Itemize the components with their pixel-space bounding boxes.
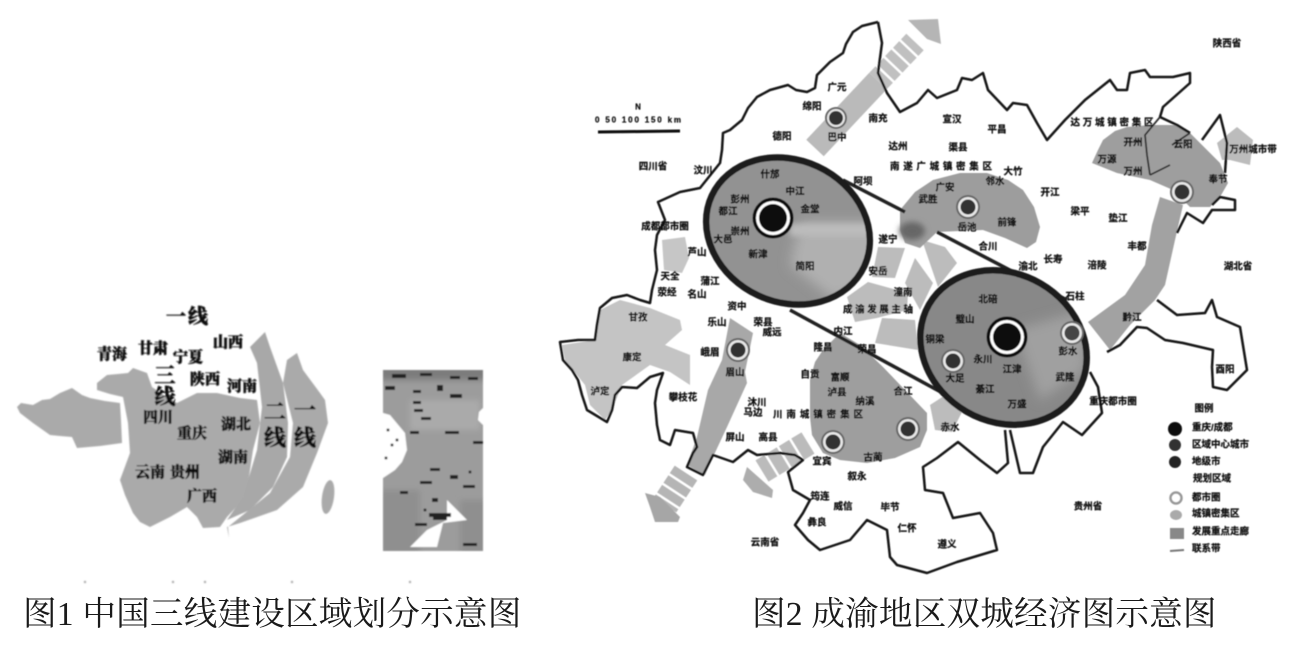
place labels: 长寿 [1043, 254, 1063, 266]
labels: provinces and fronts: 青海 [97, 345, 127, 363]
connector lines between circles [790, 180, 1067, 397]
place labels: 德阳 [772, 130, 792, 142]
region: Taiwan [320, 479, 336, 515]
labels: provinces and fronts: 湖南 [218, 448, 248, 466]
place labels: 峨眉 [700, 346, 720, 358]
place labels: 璧山 [955, 314, 975, 326]
place labels: 前锋 [997, 216, 1017, 228]
place labels: 广安 [935, 182, 955, 194]
circle: Chongqing metropolitan area [916, 266, 1091, 429]
place labels: 武隆 [1055, 372, 1075, 384]
place labels: 永川 [973, 354, 993, 366]
labels: provinces and fronts: 二 [264, 400, 286, 424]
place labels: 酉阳 [1215, 364, 1235, 376]
inner boundaries: northeast [1145, 117, 1190, 175]
place labels: 遂宁 [878, 234, 898, 246]
place labels: 遵义 [937, 538, 957, 550]
place labels: 江津 [1002, 364, 1022, 376]
legend: 规划区域 [1193, 472, 1232, 484]
map scale bar [595, 102, 681, 132]
place labels: 成都都市圈 [641, 220, 689, 232]
place labels: 陕西省 [1213, 38, 1242, 50]
place labels: 渠县 [948, 142, 968, 154]
labels: provinces and fronts: 一线 [166, 305, 208, 328]
labels: provinces and fronts: 一 [294, 398, 316, 422]
place labels: 康定 [622, 352, 642, 364]
place labels: 开江 [1040, 186, 1060, 198]
legend item: metropolitan circle [1170, 492, 1221, 504]
place labels: 彭水 [1058, 346, 1078, 358]
labels: provinces and fronts: 广西 [187, 487, 217, 505]
region: first-front strip [227, 353, 328, 538]
labels: provinces and fronts [97, 305, 316, 505]
place labels: 宜宾 [812, 456, 832, 468]
place labels: 隆昌 [813, 342, 833, 354]
place labels: 简阳 [795, 260, 815, 272]
place labels: 梁平 [1070, 206, 1090, 218]
legend item: prefecture city [1169, 456, 1221, 468]
place labels: 乐山 [707, 316, 727, 328]
place labels: 彝良 [807, 516, 827, 528]
place labels: 渝北 [1018, 260, 1038, 272]
place labels: 马边 [743, 406, 763, 418]
place labels: 宣汉 [942, 114, 962, 126]
place labels: 都江 [718, 206, 738, 218]
place labels: 荥经 [657, 286, 677, 298]
place labels: 自贡 [800, 368, 820, 380]
place labels: 甘孜 [628, 312, 648, 324]
labels: provinces and fronts: 线 [154, 385, 176, 409]
legend item: core city [1168, 422, 1233, 436]
place labels: 新津 [748, 248, 768, 260]
marker: Chengdu [752, 198, 794, 238]
labels: provinces and fronts: 河南 [227, 377, 257, 395]
corridor: east band [1088, 197, 1183, 350]
place labels: 奉节 [1208, 174, 1228, 186]
patch: northeast tail [1217, 127, 1253, 165]
corridor: southwest arrow [645, 318, 753, 522]
place labels: 合川 [978, 240, 998, 252]
place labels: 金堂 [800, 204, 820, 216]
legend item: dense urban area: 城镇密集区 [1192, 508, 1240, 520]
patch: western light area [562, 300, 690, 420]
legend item: development corridor: 发展重点走廊 [1192, 526, 1250, 538]
markers: regional cities [726, 107, 1194, 454]
city markers [726, 107, 1194, 454]
place labels: 泸定 [590, 386, 610, 398]
place labels: 綦江 [975, 384, 995, 396]
place labels: 威远 [762, 326, 782, 338]
legend item: metropolitan circle: 都市圈 [1192, 492, 1221, 504]
place labels: 贵州省 [1074, 500, 1103, 512]
labels: provinces and fronts: 三 [154, 364, 176, 388]
place labels: 万州 [1123, 166, 1143, 178]
faint scan marks [84, 581, 411, 583]
place labels: 高县 [758, 432, 778, 444]
corridor: central fan bands [847, 240, 962, 432]
place labels: 南遂广城镇密集区 [890, 160, 992, 172]
place labels: 川南城镇密集区 [773, 408, 863, 420]
place labels: 潼南 [893, 286, 913, 298]
place labels: 毕节 [880, 502, 900, 514]
region: northeast city cluster [1092, 125, 1228, 207]
place labels: 沐川 [747, 396, 767, 408]
place labels: 资中 [727, 300, 747, 312]
place labels: 合江 [893, 386, 913, 398]
place labels: 绵阳 [802, 100, 822, 112]
corridor: north arrow [815, 19, 941, 148]
labels: provinces and fronts: 山西 [213, 333, 243, 351]
place labels: 广元 [827, 82, 847, 94]
place labels: 古蔺 [863, 452, 883, 464]
outline: study region boundary [560, 22, 1008, 573]
place labels: 重庆都市圈 [1089, 396, 1137, 408]
place labels: 荣县 [753, 316, 773, 328]
place labels: 平昌 [987, 124, 1007, 136]
place labels: 黔江 [1122, 312, 1142, 324]
patch: dark cluster [899, 222, 925, 240]
place labels: 达州 [888, 140, 908, 152]
legend item: regional centre [1169, 438, 1250, 451]
place labels [590, 38, 1277, 550]
map scale bar: 0 50 100 150 km [595, 116, 681, 124]
figure 2: Chengdu-Chongqing twin-city map [560, 19, 1277, 573]
labels: provinces and fronts: 贵州 [170, 463, 200, 481]
place labels: 威信 [833, 500, 853, 512]
place labels: 屏山 [725, 432, 745, 444]
place labels: 什邡 [760, 168, 780, 180]
place labels: 彭州 [730, 194, 750, 206]
place labels: 万源 [1097, 154, 1117, 166]
place labels: 眉山 [725, 366, 745, 378]
region: south city cluster [810, 333, 927, 463]
legend item: core city: 重庆/成都 [1192, 422, 1233, 434]
labels: provinces and fronts: 宁夏 [173, 348, 203, 366]
inset: South China Sea map [382, 369, 484, 552]
labels: provinces and fronts: 重庆 [177, 424, 207, 442]
place labels: 云南省 [751, 536, 780, 548]
place labels: 仁怀 [897, 522, 917, 534]
region: second-front strip [227, 332, 288, 520]
place labels: 蒲江 [700, 276, 720, 288]
place labels: 武胜 [918, 194, 938, 206]
legend: 图例 [1194, 402, 1214, 414]
place labels: 四川省 [639, 160, 668, 172]
labels: provinces and fronts: 湖北 [221, 415, 251, 433]
marker: Chongqing [986, 316, 1028, 358]
place labels: 攀枝花 [669, 392, 698, 404]
legend item: link belt: 联系带 [1192, 542, 1221, 554]
region: north city cluster [900, 173, 1040, 248]
place labels: 万盛 [1007, 398, 1027, 410]
place labels: 北碚 [978, 294, 998, 306]
map scale bar: N [635, 102, 641, 112]
place labels: 万州城市带 [1229, 144, 1277, 156]
region: third-front main area [97, 368, 260, 528]
place labels: 垫江 [1108, 212, 1128, 224]
labels: provinces and fronts: 四川 [143, 409, 173, 426]
labels: provinces and fronts: 云南 [135, 463, 165, 481]
place labels: 崇州 [730, 226, 750, 238]
place labels: 铜梁 [925, 334, 945, 346]
legend item: regional centre: 区域中心城市 [1192, 438, 1250, 450]
caption: figure 1: 图1 中国三线建设区域划分示意图 [23, 596, 521, 633]
place labels: 叙永 [847, 470, 867, 482]
circle: Chengdu metropolitan area [702, 153, 874, 309]
place labels: 大竹 [1003, 166, 1023, 178]
place labels: 荣昌 [857, 344, 877, 356]
place labels: 纳溪 [855, 396, 875, 408]
labels: provinces and fronts: 甘肃 [138, 339, 168, 357]
place labels: 大足 [945, 372, 965, 384]
place labels: 开州 [1123, 138, 1143, 148]
corridor: south arrow [743, 443, 808, 498]
place labels: 名山 [687, 288, 707, 300]
place labels: 汶川 [693, 164, 713, 176]
legend item: development corridor [1170, 526, 1250, 539]
place labels: 大邑 [713, 234, 733, 246]
figure 1: China third-front map [17, 305, 490, 583]
place labels: 赤水 [940, 422, 960, 434]
place labels: 巴中 [827, 132, 847, 144]
place labels: 筠连 [810, 490, 830, 502]
legend item: prefecture city: 地级市 [1192, 456, 1221, 468]
place labels: 安岳 [868, 266, 888, 278]
place labels: 天全 [660, 270, 680, 282]
place labels: 丰都 [1127, 240, 1147, 252]
labels: provinces and fronts: 线 [264, 426, 286, 450]
legend item: dense urban area [1170, 508, 1240, 520]
region: western part [17, 388, 122, 448]
place labels: 云阳 [1173, 138, 1193, 150]
place labels: 内江 [833, 326, 853, 338]
place labels: 芦山 [687, 246, 707, 258]
place labels: 湖北省 [1224, 260, 1253, 272]
place labels: 岳池 [957, 222, 977, 234]
place labels: 富顺 [830, 372, 850, 384]
place labels: 阿坝 [853, 176, 873, 188]
labels: provinces and fronts: 线 [294, 426, 316, 450]
place labels: 中江 [785, 186, 805, 198]
place labels: 成渝发展主轴 [843, 304, 913, 316]
place labels: 达万城镇密集区 [1070, 116, 1154, 128]
place labels: 石柱 [1065, 290, 1085, 302]
place labels: 邻水 [985, 176, 1005, 188]
place labels: 泸县 [827, 386, 847, 398]
patch: light area near Chengdu circle [662, 237, 689, 273]
place labels: 涪陵 [1087, 260, 1107, 272]
legend item: link belt [1170, 542, 1221, 554]
labels: provinces and fronts: 陕西 [190, 370, 220, 388]
place labels: 南充 [868, 112, 888, 124]
caption: figure 2: 图2 成渝地区双城经济图示意图 [752, 596, 1217, 633]
legend [1168, 402, 1250, 554]
